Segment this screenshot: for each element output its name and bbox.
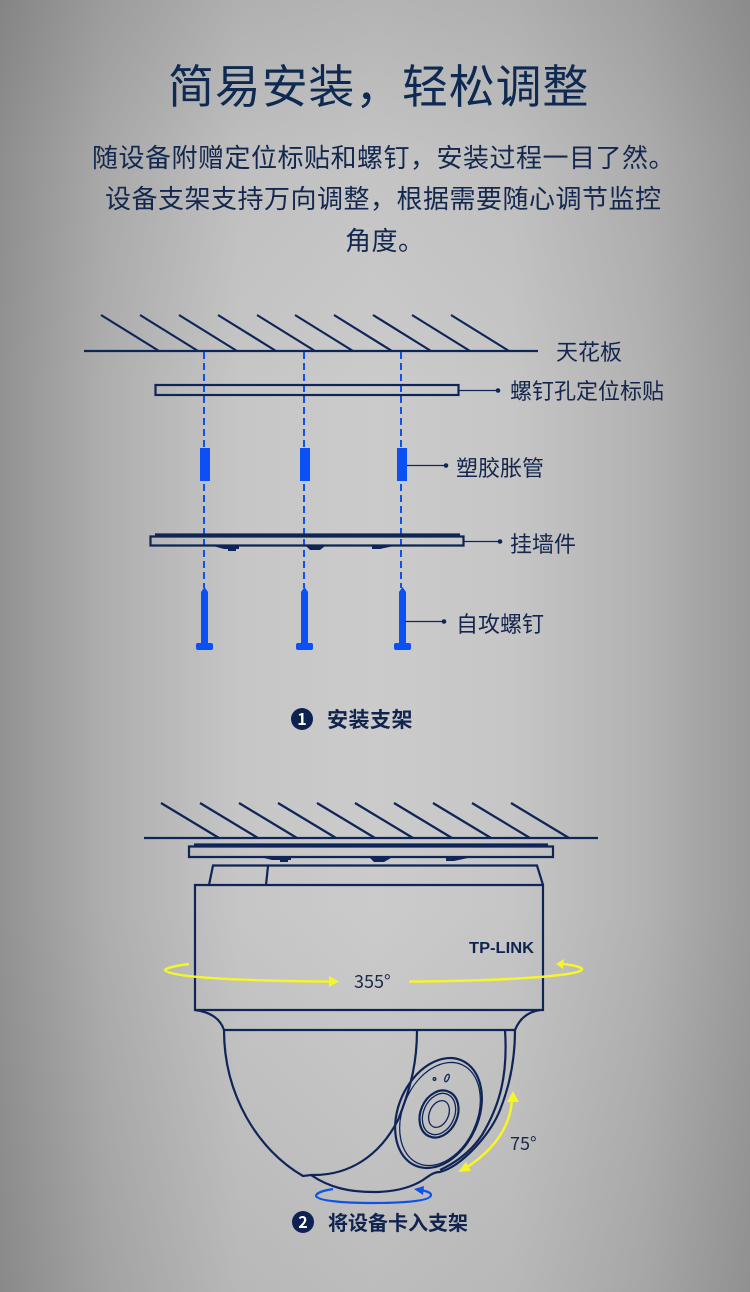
step 2 caption: 将设备卡入支架 — [328, 1207, 468, 1236]
dashed guide lines — [204, 352, 401, 588]
label: sticker: 螺钉孔定位标贴 — [510, 374, 664, 406]
step 1 caption: 安装支架 — [327, 704, 413, 734]
label: bracket: 挂墙件 — [510, 527, 576, 559]
step 2 caption: 2 — [298, 1209, 308, 1233]
label: 355 degrees: 355° — [354, 968, 391, 994]
plastic anchors — [200, 448, 407, 481]
intro text: 设备支架支持万向调整，根据需要随心调节监控 — [105, 179, 662, 216]
camera dome — [224, 1030, 515, 1192]
pan arrow 355 — [165, 959, 582, 987]
mounted bracket — [189, 844, 553, 862]
step 1 caption: 1 — [297, 706, 307, 730]
diagram: ceiling 1 — [84, 315, 538, 351]
screws — [196, 587, 411, 650]
rotation arrow blue — [316, 1186, 431, 1203]
intro text: 随设备附赠定位标贴和螺钉，安装过程一目了然。 — [92, 138, 675, 175]
intro text: 角度。 — [345, 221, 425, 258]
wall bracket — [150, 534, 464, 551]
label: bracket — [464, 527, 576, 559]
label: screw: 自攻螺钉 — [456, 607, 544, 639]
screw-hole sticker — [156, 385, 458, 395]
label: 75 degrees: 75° — [510, 1130, 537, 1156]
camera base — [195, 866, 543, 1030]
label: ceiling: 天花板 — [556, 335, 622, 367]
title: 简易安装，轻松调整 — [168, 51, 589, 117]
label: screw — [405, 607, 544, 639]
diagram: ceiling 2 — [144, 803, 598, 838]
intro text — [92, 138, 675, 258]
label: anchor: 塑胶胀管 — [456, 451, 544, 483]
brand logo: TP-LINK — [469, 940, 535, 957]
tilt arrow 75 — [458, 1091, 519, 1172]
camera lens module — [379, 1044, 498, 1182]
label: anchor — [407, 451, 544, 483]
